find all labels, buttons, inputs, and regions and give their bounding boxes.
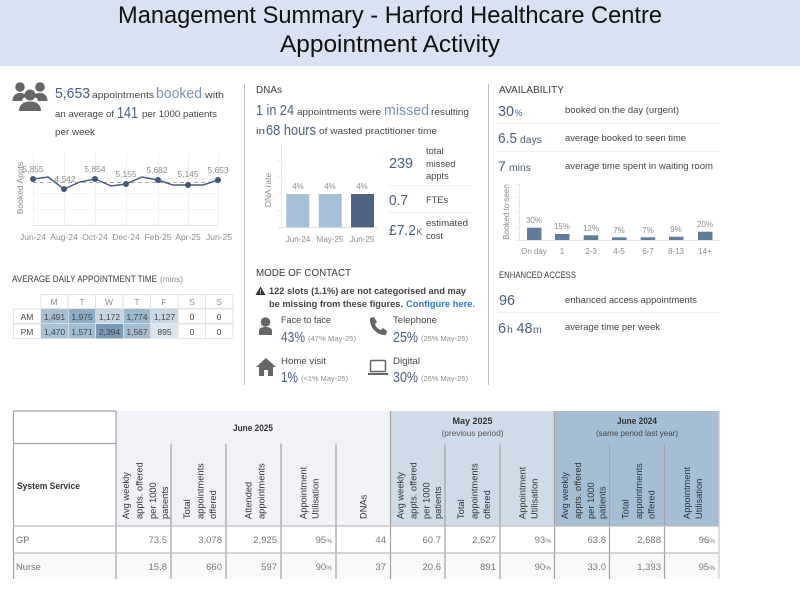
rotated column headers: Attended (244, 482, 254, 519)
bar chart: DNA rate: 4% (292, 182, 304, 191)
rotated column headers: Appointment (298, 466, 308, 519)
DNA stats: appts (426, 171, 449, 181)
DNA summary text: 68 hours (266, 122, 316, 139)
row: Nurse: 33.0 (588, 562, 606, 573)
bar chart: booked to seen: 7% (613, 226, 625, 235)
row: Nurse: Nurse (16, 562, 41, 572)
DNA summary text: appointments were (297, 107, 381, 118)
DNA stats: estimated (426, 218, 468, 228)
bar chart: DNA rate (263, 143, 378, 244)
row: Nurse: 15.8 (148, 562, 167, 573)
enhanced access stats (498, 292, 720, 337)
heat table: appointment time by day: W (105, 297, 113, 307)
column group headers (233, 416, 678, 438)
contact: face to face: Face to face (281, 315, 331, 325)
heat table: appointment time by day: PM (21, 327, 33, 337)
row: Nurse: 891 (480, 562, 496, 573)
warning note (256, 286, 475, 309)
table header backgrounds (13, 411, 719, 579)
contact: home visit: Home visit (281, 356, 326, 366)
contact: face to face (259, 315, 357, 346)
bar chart: DNA rate: 4% (356, 182, 368, 191)
rotated column headers: Utilisation (530, 479, 540, 519)
rotated column headers: offered (482, 490, 492, 519)
availability stats: % (514, 108, 523, 118)
rotated column headers: patients (160, 486, 170, 519)
booked appointments summary: 141 (117, 105, 138, 122)
booked appointments summary (55, 85, 224, 138)
row: Nurse: 90% (535, 562, 551, 573)
contact: home visit: (<1% May-25) (301, 374, 348, 383)
DNA stats: missed (426, 159, 455, 169)
contact: digital: 30% (393, 369, 418, 386)
booked appointments summary: 5,653 (55, 85, 90, 102)
heat table: appointment time by day: 1,567 (126, 327, 148, 337)
bar chart: booked to seen: 30% (526, 216, 542, 225)
heat table: appointment time by day: 0 (190, 327, 195, 337)
line chart: booked appointments: 5,155 (115, 169, 137, 179)
availability stats: average time spent in waiting room (565, 161, 713, 171)
row: GP: 93% (535, 535, 551, 546)
bar chart: booked to seen: 15% (554, 222, 570, 231)
rotated column headers: Total (456, 499, 466, 519)
rotated column headers: appts. offered (573, 462, 583, 519)
contact: digital (368, 356, 468, 386)
line chart: booked appointments: Jun-24 (20, 232, 46, 242)
heading: mode of contact: MODE OF CONTACT (256, 267, 352, 279)
heat table: appointment time by day: M (50, 297, 58, 307)
DNA summary text: of wasted practitioner time (319, 126, 437, 137)
column group headers: (same period last year) (596, 429, 678, 438)
rotated column headers: Appointment (518, 466, 528, 519)
rotated column headers: offered (208, 490, 218, 519)
bar chart: booked to seen: 14+ (698, 247, 712, 256)
bar chart: booked to seen: 12% (583, 224, 599, 233)
DNA summary text: resulting (431, 107, 469, 118)
availability stats: average booked to seen time (565, 133, 686, 143)
bar chart: DNA rate: Jun-25 (350, 235, 375, 244)
row: GP: 73.5 (148, 535, 167, 546)
row: GP: 60.7 (422, 535, 441, 546)
rotated column headers: Total (182, 499, 192, 519)
line chart: booked appointments: 5,682 (146, 165, 168, 175)
heat table: appointment time by day: S (216, 297, 222, 307)
enhanced access stats: m (533, 324, 542, 336)
rotated column headers: per 1000 (586, 482, 596, 519)
heat table: appointment time by day: 1,975 (71, 312, 93, 322)
availability stats: 7 (498, 158, 506, 174)
rotated column headers: patients (433, 486, 443, 519)
bar chart: DNA rate: May-25 (317, 235, 344, 244)
heat table: appointment time by day: 2,394 (99, 327, 120, 337)
heat table: appointment time by day (14, 294, 233, 338)
heat table: appointment time by day: AM (21, 312, 33, 322)
line chart: booked appointments: 5,145 (177, 169, 199, 179)
rotated column headers: Total (620, 499, 630, 519)
row: GP: 44 (375, 535, 386, 546)
rotated column headers: per 1000 (422, 482, 432, 519)
row: GP (16, 535, 715, 546)
title banner: Appointment Activity (280, 31, 501, 58)
heading: enhanced access: ENHANCED ACCESS (499, 270, 576, 280)
rotated column headers: per 1000 (148, 482, 158, 519)
heat table: appointment time by day: 0 (217, 312, 222, 322)
heat table: appointment time by day: 1,172 (99, 312, 120, 322)
heading: average daily appointment time: (mins) (160, 275, 183, 284)
table: system service appointments (13, 411, 719, 579)
rotated column headers: Avg weekly (121, 472, 131, 519)
rotated column headers: Utilisation (694, 479, 704, 519)
table grid lines (13, 411, 719, 579)
warning note: Configure here. (406, 299, 475, 309)
DNA summary text (256, 102, 469, 139)
bar chart: booked to seen: 9% (670, 225, 682, 234)
availability stats: booked on the day (urgent) (565, 105, 679, 115)
booked appointments summary: booked (156, 85, 202, 102)
enhanced access stats: 48 (516, 321, 532, 337)
DNA summary text: in (256, 126, 265, 137)
DNA stats: 239 (389, 155, 413, 172)
contact: digital: Digital (393, 356, 420, 366)
enhanced access stats: average time per week (565, 322, 660, 332)
column group headers: June 2025 (233, 423, 274, 434)
row: Nurse: 597 (261, 562, 277, 573)
row: Nurse: 20.6 (422, 562, 441, 573)
row: GP: 2,627 (472, 535, 496, 546)
booked appointments summary: an average of (55, 109, 114, 120)
line chart: booked appointments: 5,653 (207, 165, 229, 175)
bar chart: booked to seen: 20% (697, 220, 713, 229)
heat table: appointment time by day: 1,127 (154, 312, 175, 322)
line chart: booked appointments: Feb-25 (145, 232, 172, 242)
bar chart: booked to seen: 2-3 (585, 247, 597, 256)
heat table: appointment time by day: 1,571 (71, 327, 93, 337)
contact: telephone: (25% May-25) (421, 334, 468, 343)
enhanced access stats: 6 (498, 321, 506, 337)
rotated column headers: Avg weekly (396, 472, 406, 519)
heat table: appointment time by day: T (134, 297, 140, 307)
panel dividers (244, 84, 488, 385)
booked appointments summary: appointments (92, 90, 154, 101)
rotated column headers: appointments (634, 463, 644, 519)
heat table: appointment time by day: 0 (190, 312, 195, 322)
bar chart: booked to seen: 1 (560, 247, 565, 256)
heat table: appointment time by day: 895 (157, 327, 172, 337)
enhanced access stats: enhanced access appointments (565, 295, 697, 305)
contact: telephone: Telephone (393, 315, 437, 325)
row: Nurse: 37 (375, 562, 386, 573)
bar chart: booked to seen: 7% (642, 226, 654, 235)
enhanced access stats: 96 (499, 292, 515, 309)
warning note: 122 slots (1.1%) are not categorised and may (269, 286, 467, 296)
rotated column headers: appointments (470, 463, 480, 519)
bar chart: booked to seen: On day (521, 247, 547, 256)
contact: home visit (256, 356, 348, 386)
line chart: booked appointments: Oct-24 (82, 232, 108, 242)
warning note: be missing from these figures. (269, 299, 403, 309)
contact: telephone (370, 315, 468, 346)
booked appointments summary: with (204, 90, 224, 101)
contact: digital: (26% May-25) (421, 374, 468, 383)
row header label: System Service (17, 481, 80, 491)
booked appointments summary: per 1000 patients (142, 109, 217, 120)
rotated column headers (121, 462, 704, 519)
contact: telephone: 25% (393, 329, 418, 346)
line chart: booked appointments: 5,854 (84, 164, 106, 174)
row: Nurse: 660 (206, 562, 222, 573)
bar chart: DNA rate: 4% (324, 182, 336, 191)
heat table: appointment time by day: 1,470 (44, 327, 65, 337)
line chart: booked appointments: Aug-24 (50, 232, 78, 242)
line chart: booked appointments: Dec-24 (112, 232, 140, 242)
DNA stats (389, 146, 471, 241)
heat table: appointment time by day: F (161, 297, 167, 307)
row: GP: 96% (699, 535, 715, 546)
row: Nurse: 95% (699, 562, 715, 573)
line chart: booked appointments: 4,542 (54, 174, 76, 184)
contact: face to face: (47% May-25) (308, 334, 357, 343)
contact: home visit: 1% (281, 369, 298, 386)
rotated column headers: patients (598, 486, 608, 519)
enhanced access stats: h (507, 324, 513, 336)
row: GP: 95% (316, 535, 332, 546)
DNA stats: £7.2 (389, 222, 416, 239)
heat table: appointment time by day: 1,774 (126, 312, 148, 322)
row: Nurse: 1,393 (637, 562, 661, 573)
availability stats (498, 103, 720, 174)
rotated column headers: Utilisation (310, 479, 320, 519)
rotated column headers: appointments (196, 463, 206, 519)
row: GP: 3,078 (198, 535, 222, 546)
booked appointments summary: per week (55, 127, 95, 138)
row: GP: 2,688 (637, 535, 661, 546)
row: Nurse (16, 562, 715, 573)
availability stats: 30 (498, 103, 514, 120)
heat table: appointment time by day: T (79, 297, 85, 307)
bar chart: booked to seen: 6-7 (642, 247, 654, 256)
availability stats: mins (509, 162, 531, 174)
title banner (0, 0, 800, 66)
rotated column headers: appts. offered (408, 462, 418, 519)
bar chart: DNA rate: DNA rate (263, 172, 273, 207)
row: GP: 2,925 (253, 535, 277, 546)
column group headers: June 2024 (617, 416, 658, 427)
heat table: appointment time by day: 0 (217, 327, 222, 337)
rotated column headers: DNAs (358, 494, 368, 519)
contact: face to face: 43% (281, 329, 305, 346)
DNA stats: total (426, 146, 444, 156)
bar chart: booked to seen: Booked to seen (502, 184, 511, 240)
DNA stats: K (416, 227, 423, 237)
heading: DNAs: DNAs (256, 85, 282, 96)
DNA stats: FTEs (426, 195, 449, 205)
DNA summary text: missed (384, 102, 429, 119)
column group headers: (previous period) (442, 429, 504, 438)
line chart: booked appointments: 5,855 (22, 164, 44, 174)
rotated column headers: appts. offered (134, 462, 144, 519)
DNA stats: cost (426, 231, 443, 241)
bar chart: booked to seen (502, 184, 720, 256)
row: GP: 63.8 (588, 535, 606, 546)
line chart: booked appointments: Apr-25 (175, 232, 201, 242)
row: Nurse: 90% (316, 562, 332, 573)
line chart: booked appointments: Booked Appts (15, 162, 25, 214)
bar chart: DNA rate: Jun-24 (286, 235, 311, 244)
line chart: booked appointments: Jun-25 (206, 232, 232, 242)
heat table: appointment time by day: S (189, 297, 195, 307)
heading: average daily appointment time: AVERAGE DAILY APPOINTMENT TIME (12, 274, 157, 285)
rotated column headers: Avg weekly (560, 472, 570, 519)
DNA stats: 0.7 (389, 192, 408, 209)
column group headers: May 2025 (452, 416, 493, 427)
bar chart: booked to seen: 4-5 (613, 247, 625, 256)
heading: availability: AVAILABILITY (499, 85, 564, 96)
row: GP: GP (16, 535, 29, 545)
title banner: Management Summary - Harford Healthcare Centre (118, 2, 662, 29)
heat table: appointment time by day: 1,491 (44, 312, 65, 322)
rotated column headers: appointments (256, 463, 266, 519)
rotated column headers: Appointment (682, 466, 692, 519)
icon: people group (12, 82, 48, 111)
availability stats: days (520, 134, 542, 146)
bar chart: booked to seen: 8-13 (668, 247, 685, 256)
availability stats: 6.5 (498, 130, 517, 147)
DNA summary text: 1 in 24 (256, 102, 294, 119)
line chart: booked appointments (15, 153, 232, 242)
rotated column headers: offered (646, 490, 656, 519)
